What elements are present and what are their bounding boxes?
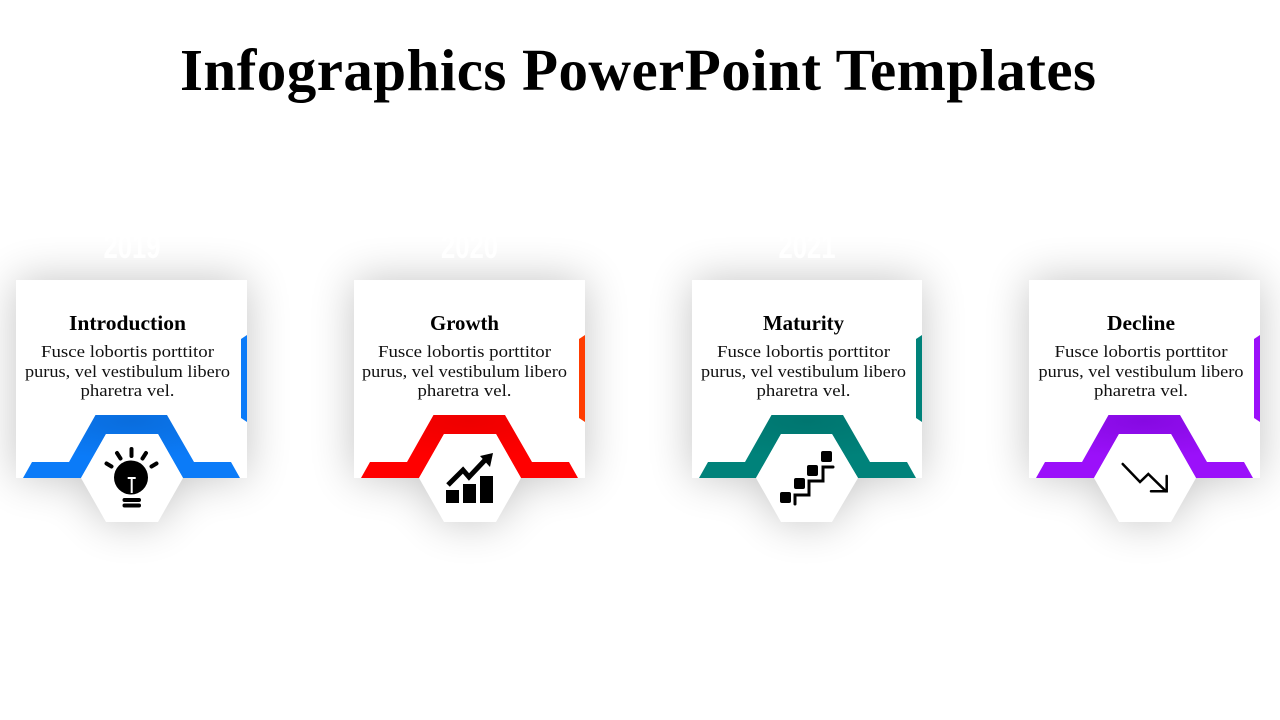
year label: 2021 [778, 228, 836, 266]
body text: Fusce lobortis porttitor [41, 342, 214, 361]
body text: Fusce lobortis porttitor [1054, 342, 1228, 361]
body text: Fusce lobortis porttitor [378, 342, 551, 361]
icon: stairs [780, 451, 833, 504]
hexagon [1094, 434, 1196, 522]
card [16, 280, 247, 478]
hexagon [81, 434, 183, 522]
card shadow [1029, 280, 1260, 522]
year label: 2020 [441, 228, 498, 266]
body text [1038, 342, 1244, 400]
icon: rising bar chart [446, 453, 493, 503]
side accent [579, 335, 585, 422]
card shadow [354, 280, 585, 522]
panel: Decline [1029, 280, 1260, 522]
body text [362, 342, 567, 400]
card [1029, 280, 1260, 478]
hexagon [419, 434, 521, 522]
body text: pharetra vel. [80, 381, 174, 400]
year label: 2019 [104, 228, 160, 266]
body text: purus, vel vestibulum libero [701, 362, 906, 381]
heading: Introduction [69, 311, 186, 335]
card [692, 280, 922, 478]
hexagon band [361, 415, 578, 478]
panel: Introduction [16, 228, 247, 522]
side accent [916, 335, 922, 422]
body text: Fusce lobortis porttitor [717, 342, 890, 361]
body text: purus, vel vestibulum libero [362, 362, 567, 381]
body text [701, 342, 906, 400]
body text: pharetra vel. [418, 381, 512, 400]
panel: Maturity [692, 228, 922, 522]
card shadow [16, 280, 247, 522]
hexagon band [23, 415, 240, 478]
title: Infographics PowerPoint Templates [180, 37, 1096, 103]
card shadow [692, 280, 922, 522]
card [354, 280, 585, 478]
heading: Maturity [763, 311, 844, 335]
heading: Decline [1107, 311, 1175, 335]
body text: pharetra vel. [1094, 381, 1188, 400]
hexagon band [1036, 415, 1253, 478]
side accent [1254, 335, 1260, 422]
side accent [241, 335, 247, 422]
icon: falling arrow [1123, 464, 1167, 491]
hexagon [756, 434, 858, 522]
body text [25, 342, 230, 400]
hexagon band [699, 415, 916, 478]
body text: purus, vel vestibulum libero [25, 362, 230, 381]
icon: light bulb [106, 449, 156, 506]
heading: Growth [430, 311, 499, 335]
panel: Growth [354, 228, 585, 522]
body text: pharetra vel. [756, 381, 850, 400]
body text: purus, vel vestibulum libero [1038, 362, 1244, 381]
